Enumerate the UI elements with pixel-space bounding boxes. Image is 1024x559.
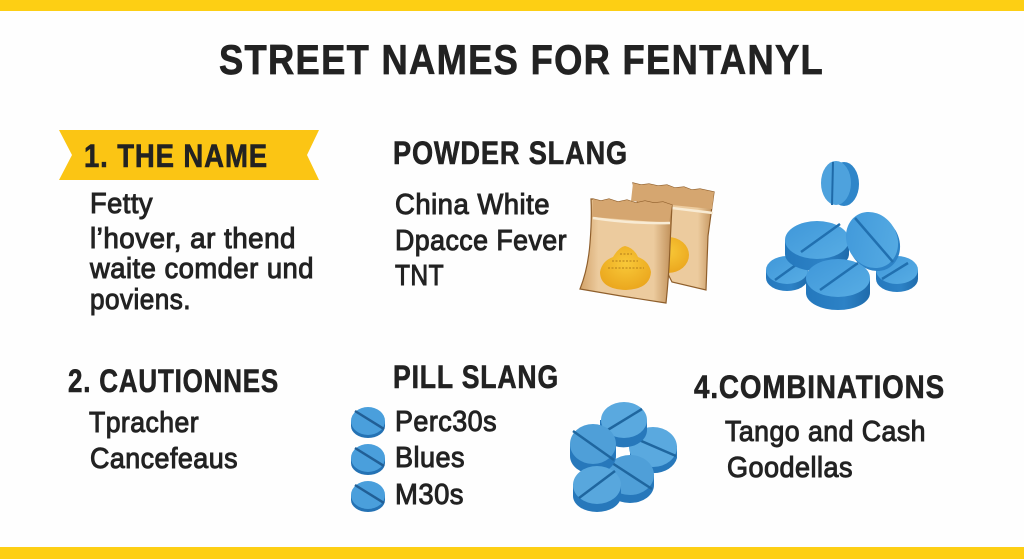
panel: powder slang — [393, 135, 628, 292]
text block: the name description: waite comder und — [89, 253, 314, 285]
list: powder slang names: TNT — [395, 260, 444, 292]
title: STREET NAMES FOR FENTANYL — [219, 36, 824, 83]
text block: combinations items: Tango and Cash — [725, 416, 926, 448]
panel: the name — [59, 130, 319, 316]
pill: floating — [821, 161, 859, 206]
pill: back left — [766, 256, 808, 291]
heading: powder slang: POWDER SLANG — [393, 135, 628, 171]
pill: center low — [606, 455, 654, 503]
icon: pile of blue pills — [766, 161, 918, 310]
pill: front left — [573, 466, 621, 512]
text block: the name description — [89, 188, 314, 316]
panel: combinations — [694, 369, 945, 484]
text block: combinations items: Goodellas — [727, 452, 853, 484]
text block: combinations items — [725, 416, 926, 484]
list item: M30s: M30s — [395, 479, 464, 511]
bullet icon: pill 2 — [351, 444, 385, 475]
heading: pill slang: PILL SLANG — [393, 359, 559, 395]
banner ribbon — [59, 130, 319, 180]
pill: front — [806, 259, 870, 310]
bottom yellow bar — [0, 547, 1024, 559]
pill: left — [570, 424, 616, 474]
pill: back right — [876, 256, 918, 292]
list: powder slang names: China White — [395, 189, 550, 221]
bullet icon: pill 1 — [351, 407, 385, 438]
text block: cautionnes items — [89, 407, 238, 475]
icon: scattered blue pills — [570, 402, 677, 512]
list item: Blues: Blues — [395, 442, 465, 474]
top yellow bar — [0, 0, 1024, 11]
panel: cautionnes — [68, 363, 279, 475]
list item: Perc30s: Perc30s — [395, 406, 497, 438]
list: powder slang names: Dpacce Fever — [395, 225, 567, 257]
panel: pill slang — [351, 359, 559, 512]
text block: cautionnes items: Cancefeaus — [90, 443, 238, 475]
pill: right — [629, 427, 677, 473]
text block: cautionnes items: Tpracher — [89, 407, 199, 439]
icon: powder bags — [580, 183, 714, 303]
heading: cautionnes: 2. CAUTIONNES — [68, 363, 279, 399]
heading: the name: 1. THE NAME — [84, 138, 268, 174]
pill: top — [600, 402, 647, 447]
list: powder slang names — [395, 189, 567, 292]
heading: combinations: 4.COMBINATIONS — [694, 369, 945, 405]
pill: middle — [785, 221, 849, 271]
pill: tilted — [836, 202, 910, 281]
text block: the name description: poviens. — [90, 284, 191, 316]
text block: the name description: l’hover, ar thend — [90, 223, 296, 255]
bullet icon: pill 3 — [351, 481, 385, 512]
text block: the name description: Fetty — [90, 188, 153, 220]
